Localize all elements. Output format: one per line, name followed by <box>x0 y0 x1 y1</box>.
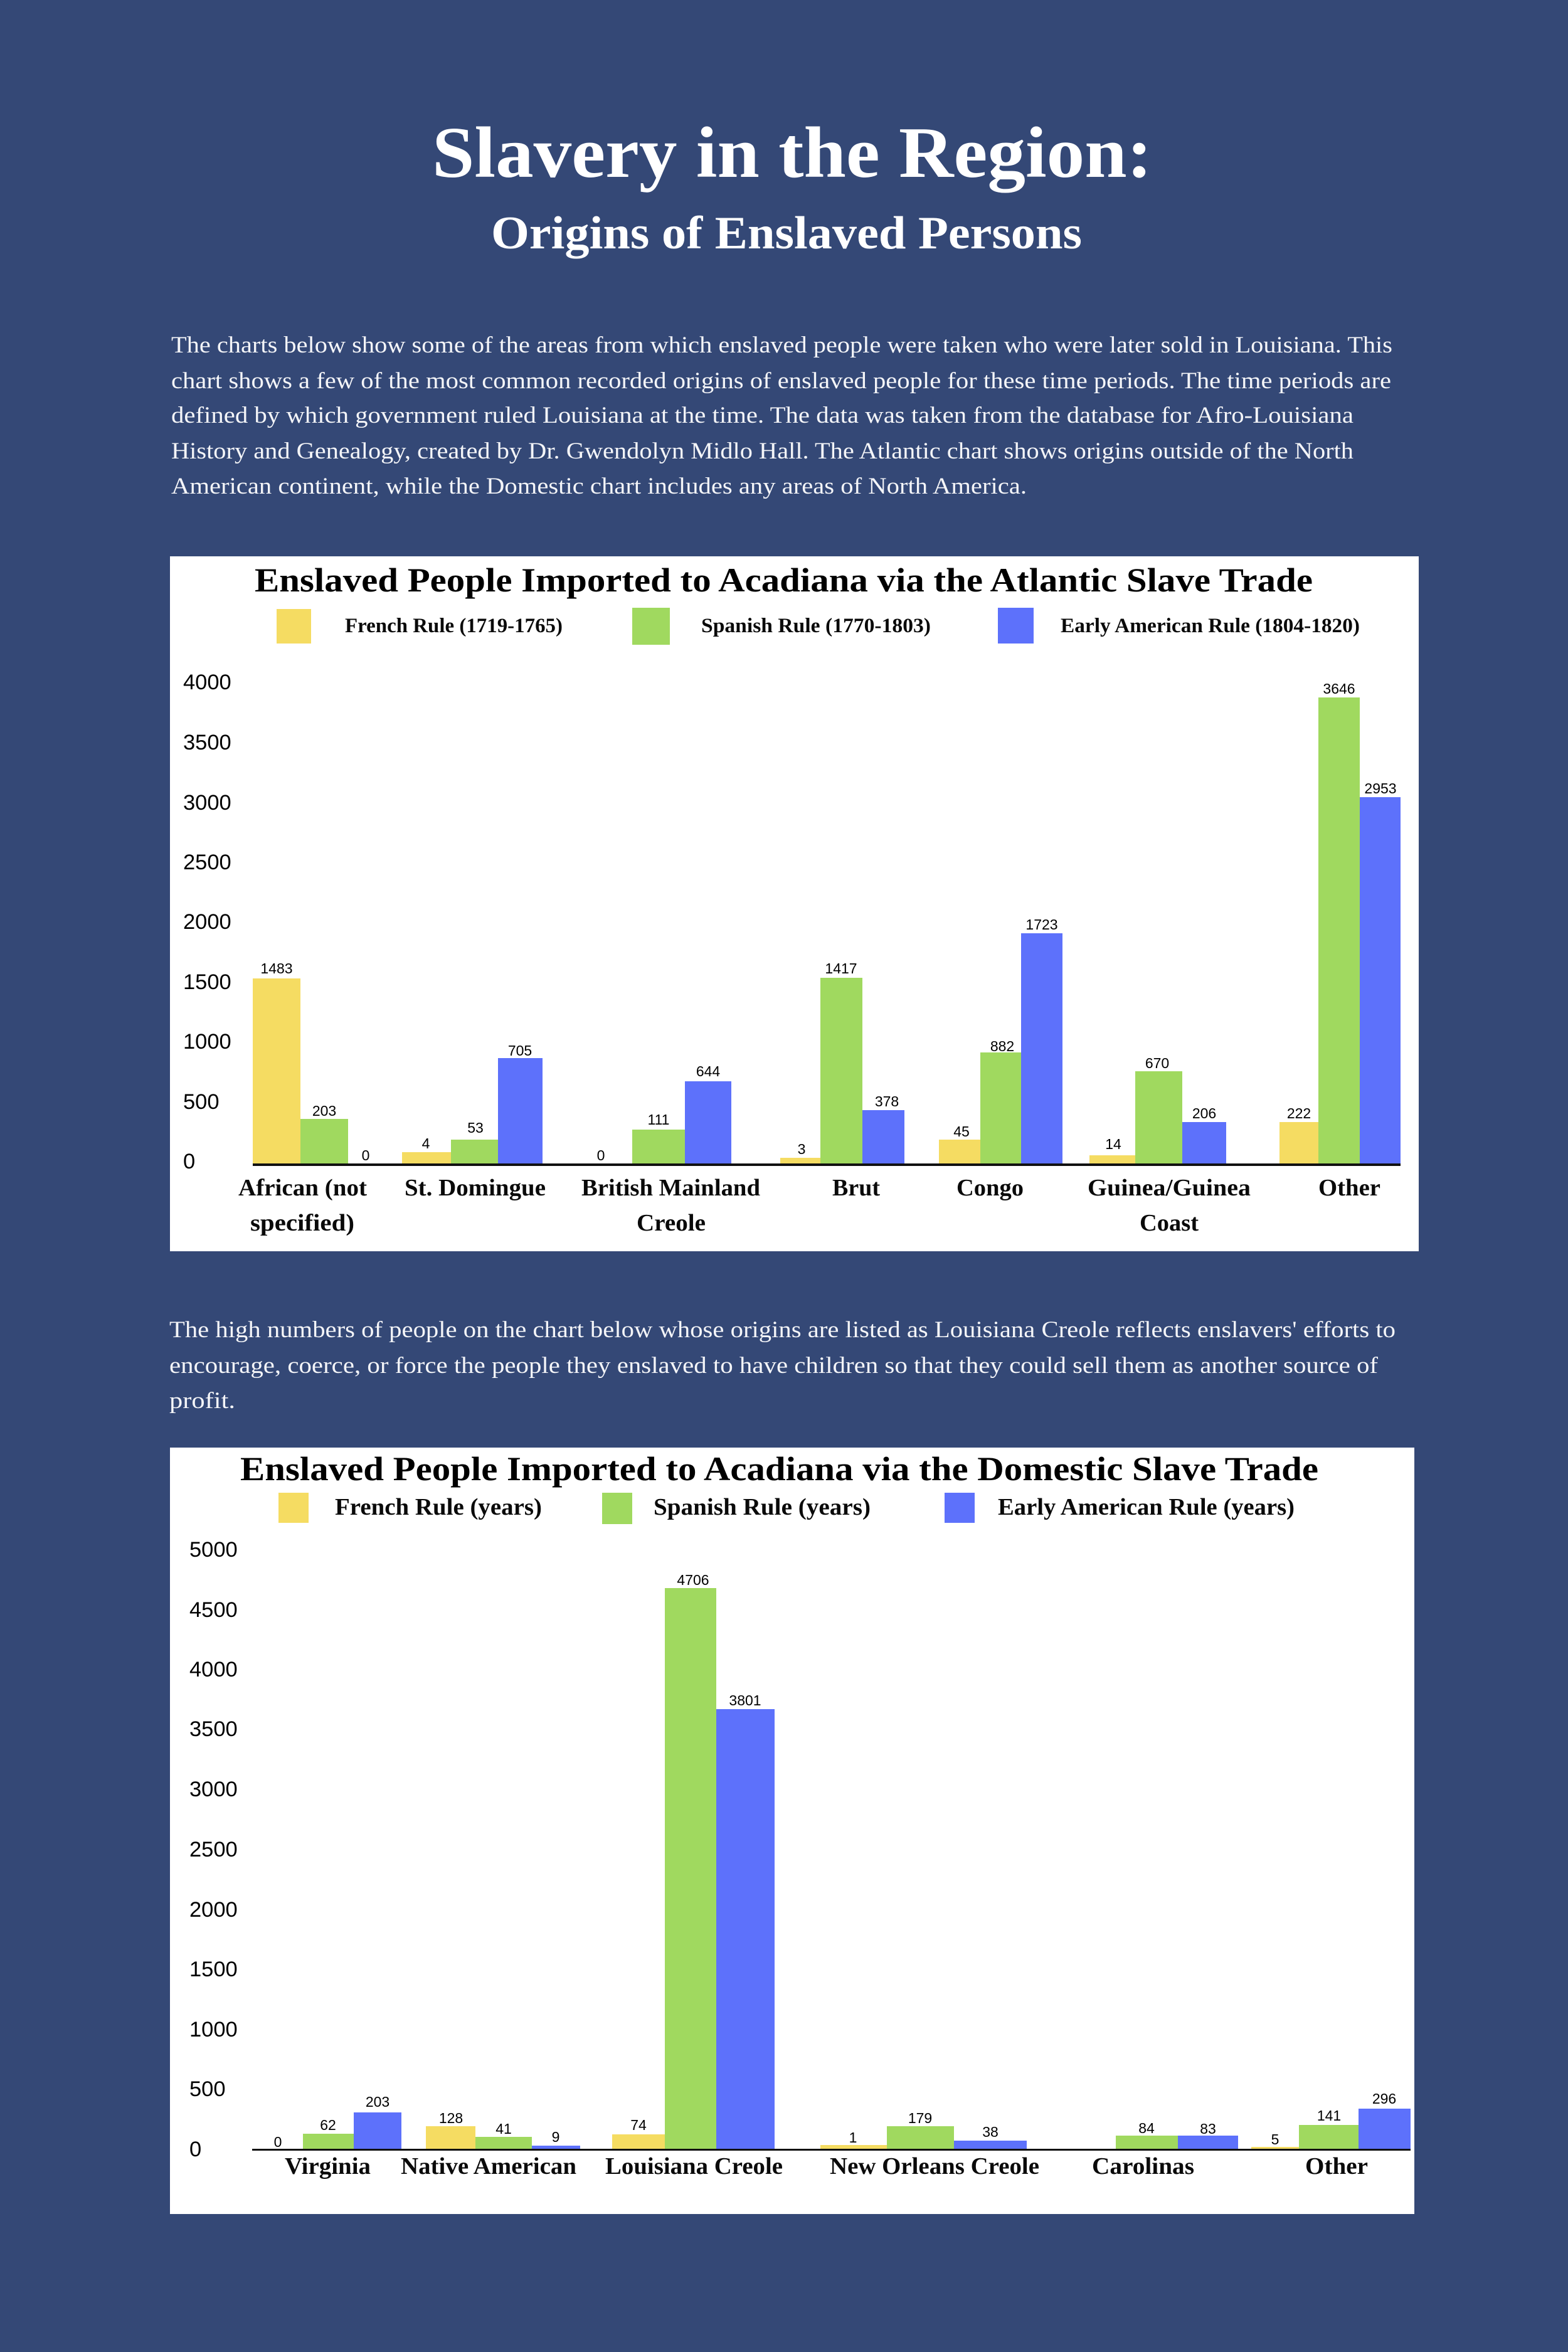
value labels: Domestic: 83 <box>1200 2121 1216 2137</box>
category labels: Atlantic: African (not <box>238 1175 367 1201</box>
legend: Atlantic: Early American Rule (1804-1820) <box>1061 615 1360 637</box>
value labels: Atlantic <box>260 681 1397 1163</box>
value labels: Domestic: 9 <box>552 2129 559 2145</box>
value labels: Atlantic: 705 <box>508 1042 532 1059</box>
legend: Atlantic: Spanish Rule (1770-1803) <box>701 615 931 637</box>
y axis labels: Domestic: 1000 <box>189 2018 238 2042</box>
category labels: Atlantic: St. Domingue <box>405 1175 546 1201</box>
panel: Domestic slave trade chart <box>170 1448 1414 2214</box>
value labels: Domestic: 84 <box>1138 2120 1155 2136</box>
value labels: Atlantic: 53 <box>467 1120 484 1136</box>
subtitle: Origins of Enslaved Persons <box>491 208 1082 259</box>
legend: Domestic: French Rule (years) <box>335 1494 542 1520</box>
value labels: Domestic: 1 <box>849 2129 857 2146</box>
bar chart: Atlantic bars <box>253 697 1401 1166</box>
value labels: Domestic: 4706 <box>677 1572 709 1588</box>
y axis labels: Atlantic: 3000 <box>183 791 231 815</box>
value labels: Atlantic: 1723 <box>1025 916 1058 933</box>
y axis labels: Domestic: 2500 <box>189 1838 238 1862</box>
y axis labels: Atlantic: 1000 <box>183 1030 231 1054</box>
value labels: Atlantic: 3 <box>798 1141 805 1157</box>
category labels: Domestic: Other <box>1305 2153 1368 2180</box>
second paragraph: encourage, coerce, or force the people they enslaved to have children so that they could sell them as another source of <box>169 1353 1379 1379</box>
value labels: Domestic: 203 <box>366 2094 389 2110</box>
value labels: Domestic: 128 <box>439 2110 463 2126</box>
category labels: Atlantic: Guinea/Guinea <box>1088 1175 1251 1201</box>
y axis labels: Domestic: 1500 <box>189 1957 238 1981</box>
panel: Atlantic slave trade chart <box>170 556 1419 1251</box>
intro paragraph <box>171 332 1392 499</box>
value labels: Atlantic: 203 <box>312 1103 336 1119</box>
value labels: Atlantic: 670 <box>1145 1055 1169 1071</box>
second paragraph: profit. <box>169 1388 235 1414</box>
y axis labels: Atlantic: 3500 <box>183 731 231 755</box>
y axis labels: Domestic: 0 <box>189 2137 201 2161</box>
intro paragraph: History and Genealogy, created by Dr. Gwendolyn Midlo Hall. The Atlantic chart shows origins outside of the North <box>171 438 1354 464</box>
y axis labels: Atlantic <box>183 670 231 1173</box>
y axis labels: Domestic: 4000 <box>189 1658 238 1682</box>
y axis labels: Domestic: 2000 <box>189 1898 238 1922</box>
category labels: Atlantic: Brut <box>832 1175 880 1201</box>
value labels: Atlantic: 222 <box>1287 1105 1311 1121</box>
value labels: Atlantic: 0 <box>597 1147 605 1163</box>
value labels: Atlantic: 2953 <box>1364 780 1397 797</box>
legend: Atlantic <box>277 608 1360 645</box>
value labels: Domestic: 62 <box>320 2117 336 2133</box>
bar chart: Domestic bars <box>252 1588 1411 2151</box>
y axis labels: Domestic: 3000 <box>189 1777 238 1801</box>
value labels: Domestic: 74 <box>630 2117 647 2133</box>
y axis labels: Atlantic: 500 <box>183 1090 220 1114</box>
category labels: Domestic: Virginia <box>285 2153 371 2180</box>
category labels: Atlantic: British Mainland <box>581 1175 760 1201</box>
category labels: Atlantic: Coast <box>1140 1210 1199 1236</box>
value labels: Domestic <box>274 1572 1396 2150</box>
category labels: Domestic: Native American <box>401 2153 576 2180</box>
value labels: Atlantic: 111 <box>648 1111 669 1128</box>
value labels: Atlantic: 206 <box>1192 1105 1216 1121</box>
value labels: Atlantic: 882 <box>990 1038 1014 1054</box>
chart title: Domestic: Enslaved People Imported to Acadiana via the Domestic Slave Trade <box>240 1450 1318 1488</box>
y axis labels: Domestic: 5000 <box>189 1538 238 1562</box>
y axis labels: Atlantic: 4000 <box>183 670 231 694</box>
y axis labels: Domestic: 4500 <box>189 1598 238 1622</box>
chart title: Atlantic: Enslaved People Imported to Acadiana via the Atlantic Slave Trade <box>255 561 1313 599</box>
category labels: Domestic: Carolinas <box>1092 2153 1194 2180</box>
y axis labels: Atlantic: 2000 <box>183 910 231 934</box>
category labels: Atlantic: Other <box>1318 1175 1380 1201</box>
category labels: Atlantic: specified) <box>250 1210 354 1236</box>
intro paragraph: defined by which government ruled Louisiana at the time. The data was taken from the database for Afro-Louisiana <box>171 403 1353 428</box>
value labels: Atlantic: 378 <box>875 1093 899 1110</box>
value labels: Domestic: 296 <box>1372 2090 1396 2107</box>
value labels: Domestic: 0 <box>274 2134 282 2150</box>
value labels: Domestic: 5 <box>1271 2131 1279 2148</box>
y axis labels: Domestic <box>189 1538 238 2161</box>
value labels: Atlantic: 4 <box>422 1135 430 1152</box>
legend: Atlantic: French Rule (1719-1765) <box>345 615 563 637</box>
legend: Domestic: Early American Rule (years) <box>998 1494 1295 1520</box>
value labels: Atlantic: 1417 <box>825 960 857 977</box>
category labels: Atlantic: Congo <box>956 1175 1024 1201</box>
y axis labels: Atlantic: 0 <box>183 1150 195 1173</box>
second paragraph <box>169 1317 1396 1414</box>
value labels: Atlantic: 14 <box>1105 1136 1121 1152</box>
intro paragraph: chart shows a few of the most common recorded origins of enslaved people for these time periods. The time periods are <box>171 368 1391 394</box>
category labels: Atlantic: Creole <box>637 1210 706 1236</box>
value labels: Atlantic: 45 <box>953 1123 970 1140</box>
value labels: Atlantic: 1483 <box>260 960 293 977</box>
second paragraph: The high numbers of people on the chart below whose origins are listed as Louisiana Creole reflects enslavers' efforts to <box>169 1317 1396 1343</box>
category labels: Atlantic <box>238 1175 1380 1236</box>
value labels: Domestic: 141 <box>1317 2107 1341 2124</box>
intro paragraph: The charts below show some of the areas from which enslaved people were taken who were later sold in Louisiana. This <box>171 332 1392 358</box>
value labels: Domestic: 179 <box>908 2110 932 2126</box>
category labels: Domestic: Louisiana Creole <box>605 2153 783 2180</box>
legend: Domestic <box>278 1493 1295 1524</box>
y axis labels: Domestic: 500 <box>189 2077 226 2101</box>
value labels: Atlantic: 0 <box>362 1147 369 1163</box>
category labels: Domestic: New Orleans Creole <box>830 2153 1039 2180</box>
value labels: Atlantic: 644 <box>696 1063 720 1079</box>
y axis labels: Domestic: 3500 <box>189 1717 238 1741</box>
y axis labels: Atlantic: 1500 <box>183 970 231 994</box>
legend: Domestic: Spanish Rule (years) <box>654 1494 871 1520</box>
value labels: Domestic: 41 <box>495 2121 512 2137</box>
y axis labels: Atlantic: 2500 <box>183 850 231 874</box>
category labels: Domestic <box>285 2153 1368 2180</box>
value labels: Domestic: 38 <box>982 2124 999 2140</box>
value labels: Domestic: 3801 <box>729 1692 761 1708</box>
value labels: Atlantic: 3646 <box>1323 681 1355 697</box>
title: Slavery in the Region: <box>432 113 1152 193</box>
intro paragraph: American continent, while the Domestic chart includes any areas of North America. <box>171 474 1027 499</box>
